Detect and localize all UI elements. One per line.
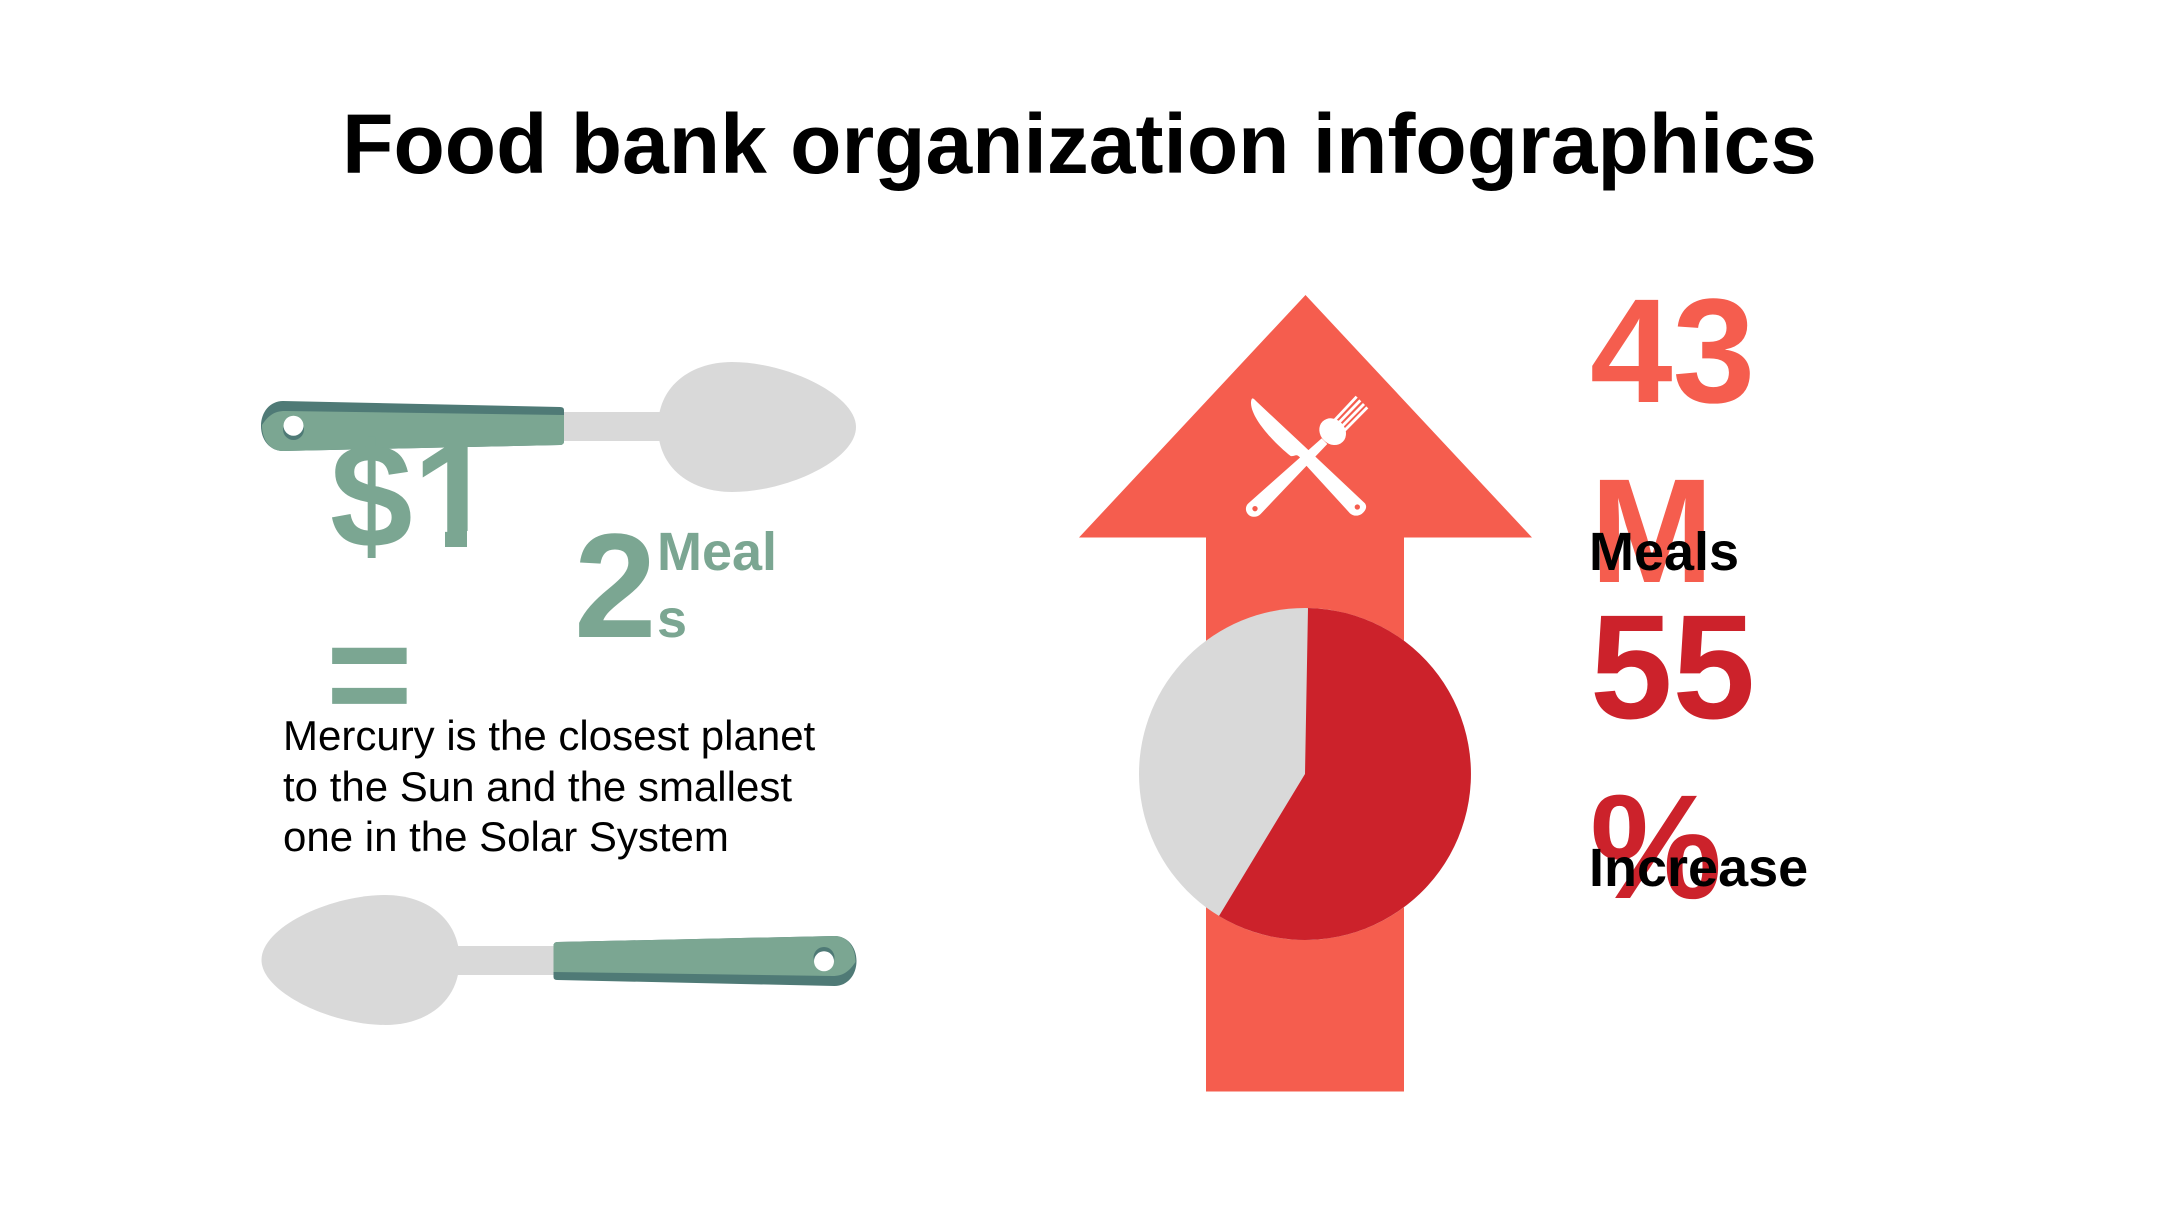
stat: $1 =: = [326,592,413,757]
icon: crossed knife and fork [1246,397,1367,517]
stat: $1 =: $1 [330,414,495,579]
stat: 2: 2 [574,504,657,669]
arrow: upward growth arrow [1079,295,1532,1092]
label: Meals (green): Meal [657,522,777,582]
description text: Mercury is the closest planet [283,712,815,759]
description text: one in the Solar System [283,813,729,860]
title: Food bank organization infographics [342,97,1817,191]
stat: 55 % [1590,585,1755,930]
mask: trims the base serif of the numeral 1 to match the reference glyph [408,531,445,552]
icon: top spoon [261,362,856,492]
description text [283,712,815,860]
stat: 55 %: 55 [1590,585,1755,750]
label: Meals (green): s [657,589,687,649]
stat: 43 M: 43 [1590,269,1755,434]
label: Increase: Increase [1589,838,1808,898]
pie chart: 55% increase [1139,608,1471,940]
stat: 55 %: % [1590,765,1722,930]
icon: bottom spoon [262,895,856,1025]
description text: to the Sun and the smallest [283,763,792,810]
label: Meals: Meals [1589,522,1739,582]
stat: 43 M [1590,269,1755,614]
stat: $1 = [326,414,495,757]
mask: trims the base serif of the numeral 1, right side [467,531,498,552]
label: Meals (green) [657,522,777,649]
stat: 43 M: M [1590,449,1714,614]
